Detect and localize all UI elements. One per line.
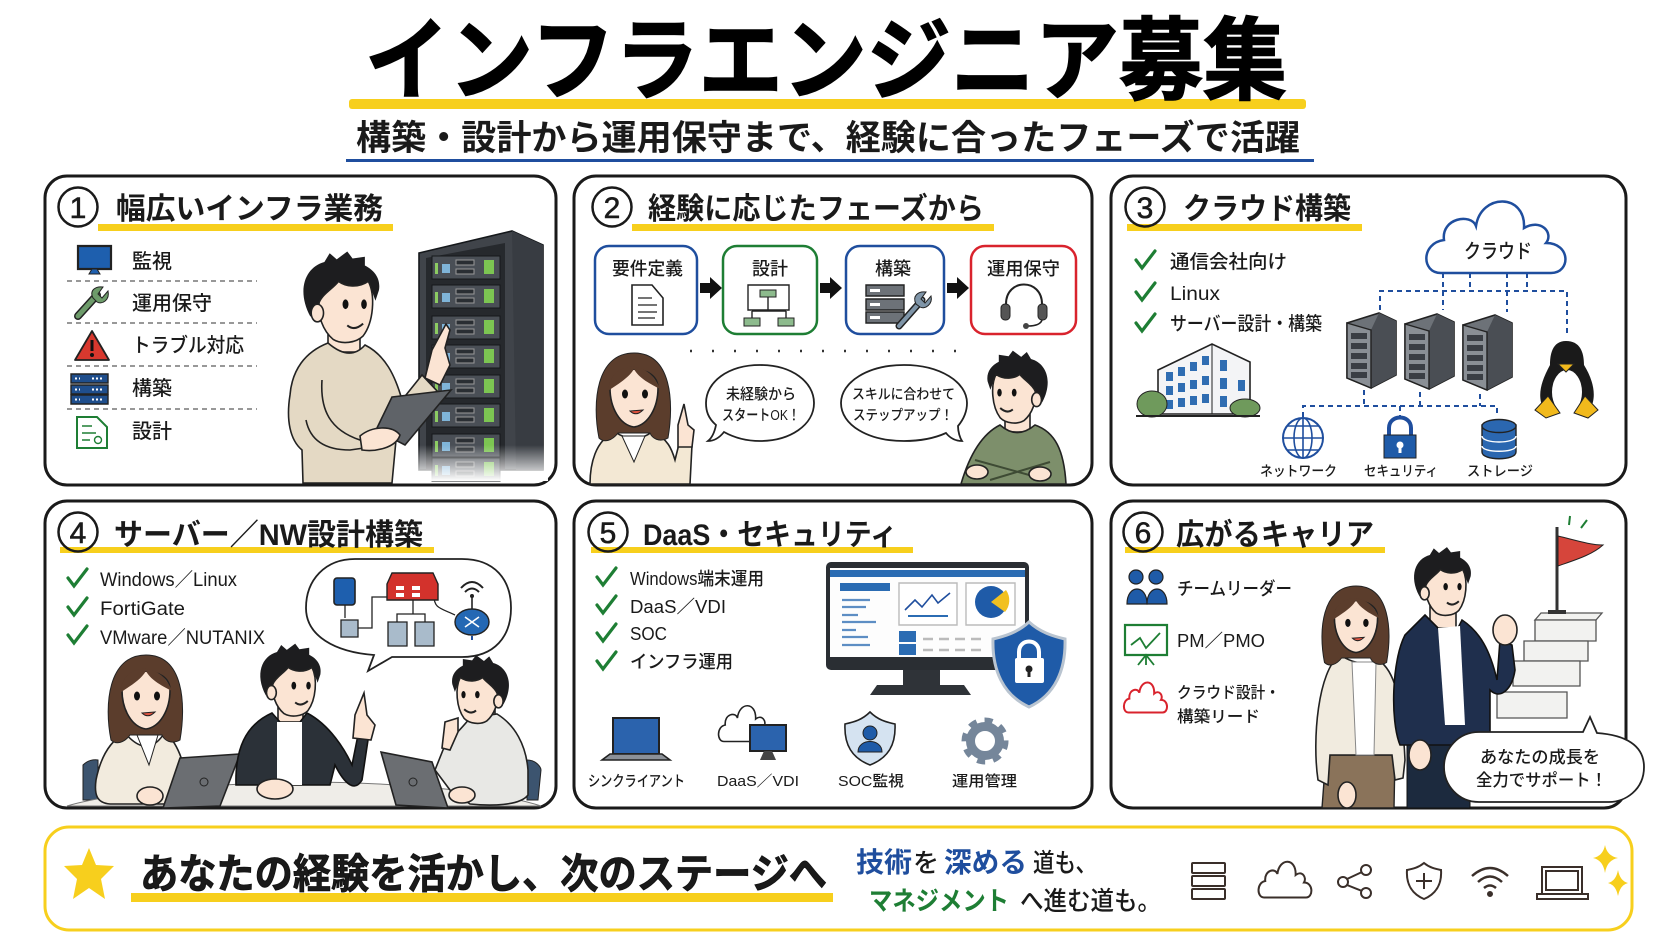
checklist [597,568,764,672]
heading: panel 3 [1126,188,1362,231]
icon: sparkles [1593,845,1628,896]
banner message: へ進む道も。 [1020,886,1161,916]
banner message [856,847,1161,916]
icon: warning [75,331,109,360]
heading: panel 2: 経験に応じたフェーズから [648,192,984,226]
speech bubble: あなたの成長を全力でサポート [1444,717,1644,802]
heading: panel 6: 6 [1135,517,1151,550]
label: DaaS／VDI: DaaS／VDI [717,773,799,790]
checklist: SOC [630,624,667,644]
icon: gear [964,720,1006,762]
icon: server [71,374,108,404]
icon: security lock [1384,418,1416,458]
checklist [1136,251,1322,335]
arrow [700,277,722,299]
label: SOC監視: SOC監視 [838,773,904,790]
flow step: 構築: 構築 [875,259,911,279]
illustration: woman with laptop [95,655,240,808]
flow step: 構築 [846,246,944,334]
illustration: stairs [1497,613,1602,718]
checklist: インフラ運用 [630,652,733,672]
illustration: man in navy jacket [1394,547,1517,808]
heading: panel 5: 5 [600,517,616,550]
heading: panel 1: 1 [70,192,86,225]
speech bubble: スキルに合わせてステップアップ [841,365,967,441]
checklist: FortiGate [100,599,185,620]
label: PM／PMO: PM／PMO [1177,631,1265,651]
heading: panel 3: 3 [1137,192,1153,225]
illustration: woman [590,353,694,484]
icon: shield lock [993,622,1065,707]
illustration: man thinking with laptop [381,655,528,808]
illustration: man presenting [236,644,375,799]
label: チームリーダー: チームリーダー [1177,579,1292,599]
speech bubble: 未経験からスタートOK: 未経験から [726,386,796,403]
label: トラブル対応: トラブル対応 [132,333,244,357]
heading: panel 4: 4 [70,517,86,550]
checklist: DaaS／VDI [630,597,726,617]
speech bubble: スキルに合わせてステップアップ: スキルに合わせて [852,386,955,402]
label: 運用管理: 運用管理 [952,772,1017,790]
illustration: man arms crossed [961,351,1066,484]
heading: panel 1: 幅広いインフラ業務 [116,193,383,226]
label: ネットワーク: ネットワーク [1260,463,1337,479]
banner message: を [913,848,939,878]
icon: document [77,417,107,448]
speech bubble: あなたの成長を全力でサポート: あなたの成長を [1480,748,1600,767]
heading: panel 3: クラウド構築 [1183,193,1351,226]
label: 設計: 設計 [132,420,172,443]
icon: laptop [602,718,670,760]
speech bubble: 未経験からスタートOK: スタートOK！ [722,407,800,424]
label: 運用保守: 運用保守 [132,292,212,315]
checklist: Linux [1170,284,1221,305]
icon: cloud desktop [719,706,786,760]
icon: tux [1535,341,1598,418]
banner message: 深める [944,847,1027,878]
speech bubble: 未経験からスタートOK [706,365,814,441]
arrow [947,277,969,299]
icon: cloud [1426,201,1565,273]
heading: panel 4: サーバー／NW設計構築 [114,519,423,552]
label: クラウド設計・構築リード [1177,684,1280,726]
illustration: chairs and table [67,760,541,806]
heading: panel 5: DaaS・セキュリティ [643,519,897,552]
heading: panel 5 [588,512,913,553]
checklist [68,569,265,649]
icon: team [1127,570,1167,604]
icon: storage [1482,420,1516,459]
subtitle: 構築・設計から運用保守まで、経験に合ったフェーズで活躍 [356,118,1300,158]
icon: building [1136,344,1260,417]
heading: panel 2 [592,188,994,231]
flow step: 要件定義: 要件定義 [612,259,683,279]
network connectors [1303,273,1567,417]
panel: DaaS・セキュリティ [574,501,1092,808]
checklist: 通信会社向け [1170,251,1287,273]
icon: star [64,848,114,899]
illustration: engineer with tablet [288,251,451,483]
panel: 幅広いインフラ業務 [45,176,556,485]
checklist: Windows／Linux [100,569,237,591]
banner message: 技術 [856,847,912,878]
heading: panel 6: 広がるキャリア [1176,518,1374,552]
flow step: 設計: 設計 [752,259,788,279]
icon: servers [1347,313,1512,390]
icon: cloud: クラウド [1464,240,1532,263]
icon: monitor [78,246,111,274]
banner headline: あなたの経験を活かし、次のステージへ [140,851,827,897]
arrow [820,277,842,299]
heading: panel 6 [1124,512,1385,553]
icon: SOC shield [845,712,895,765]
panel: サーバー／NW設計構築 [45,501,556,808]
flow step: 運用保守: 運用保守 [987,259,1060,279]
illustration: flag [1548,516,1603,612]
speech bubble: スキルに合わせてステップアップ: ステップアップ！ [853,407,953,423]
banner: bottom call to action [45,827,1632,930]
illustration: server rack [414,231,548,481]
title: インフラエンジニア募集 [365,12,1287,112]
label: シンクライアント: シンクライアント [588,773,685,790]
banner message: 道も、 [1033,848,1097,878]
flow step: 設計 [723,246,817,334]
panel: 広がるキャリア [1111,501,1644,808]
icon: wrench [78,287,108,316]
checklist: サーバー設計・構築 [1170,313,1322,335]
checklist: VMware／NUTANIX [100,627,265,649]
label: クラウド設計・構築リード: 構築リード [1177,708,1260,726]
icon: network globe [1283,418,1323,458]
panel: クラウド構築 [1111,176,1626,485]
heading: panel 4 [58,512,434,553]
flow step: 要件定義 [595,246,697,334]
label: 構築: 構築 [132,377,172,400]
checklist: Windows端末運用 [630,569,764,589]
icon row [1192,862,1588,899]
speech bubble: network diagram [306,559,511,671]
label: 監視: 監視 [132,250,172,273]
speech bubble: あなたの成長を全力でサポート: 全力でサポート！ [1476,771,1607,790]
label: ストレージ: ストレージ [1467,463,1533,479]
icon: red cloud [1124,682,1167,712]
flow step: 運用保守 [971,246,1076,334]
heading: panel 2: 2 [604,192,620,225]
panel: 経験に応じたフェーズから [574,176,1092,485]
label: セキュリティ: セキュリティ [1364,463,1438,479]
label: クラウド設計・構築リード: クラウド設計・ [1177,684,1280,702]
icon: presentation board [1125,625,1167,665]
illustration: woman looking up [1316,586,1405,808]
banner message: マネジメント [869,886,1009,916]
heading: panel 1 [58,188,393,231]
illustration: monitor dashboard [826,562,1029,695]
